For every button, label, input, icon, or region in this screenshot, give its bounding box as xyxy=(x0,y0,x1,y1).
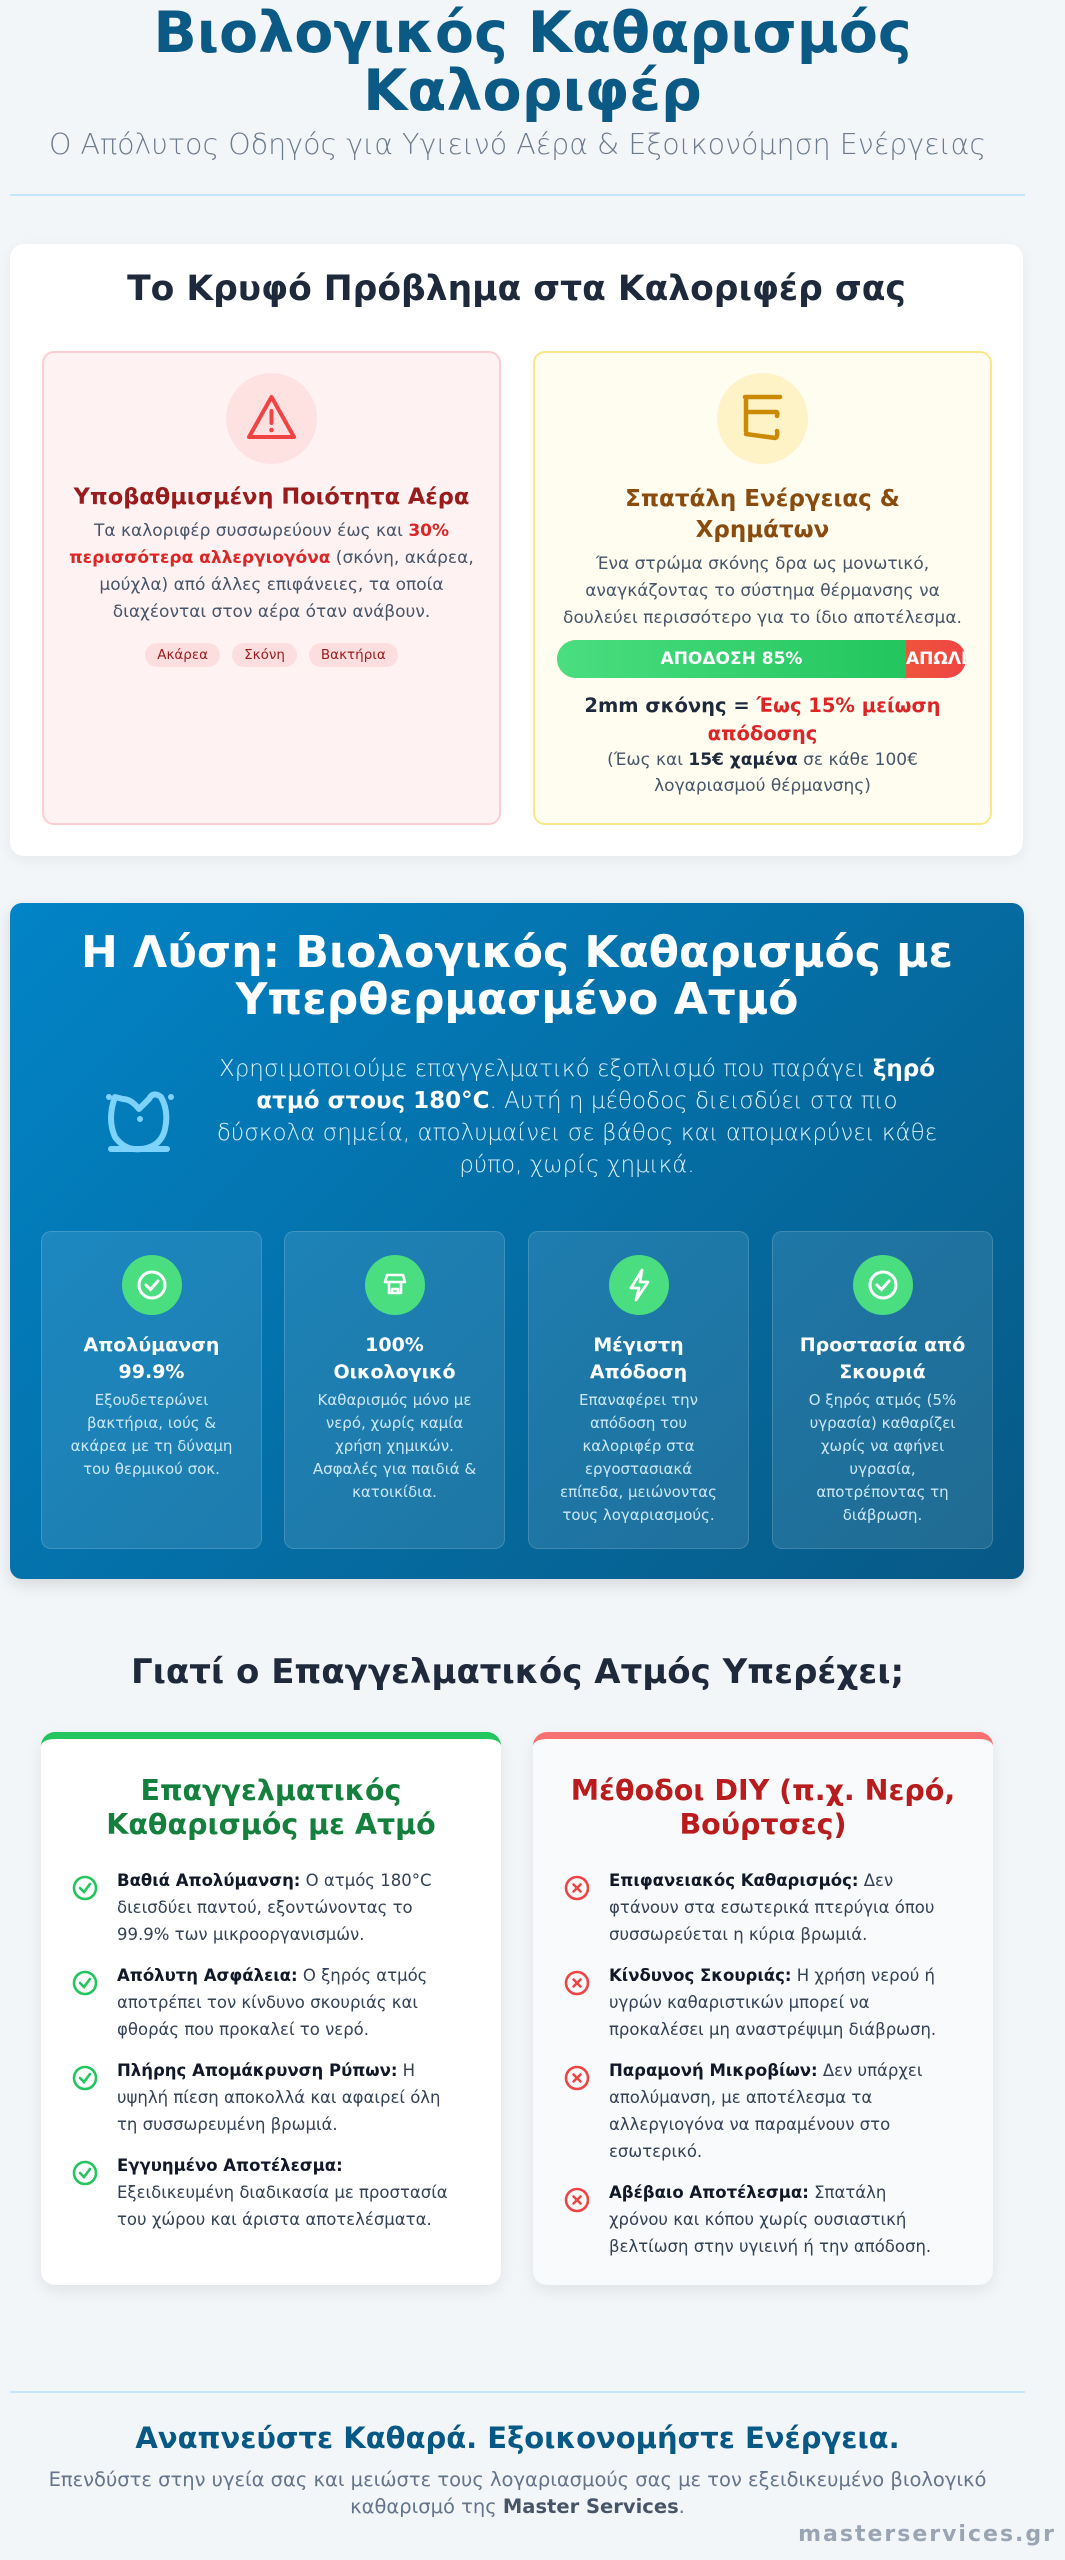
panel: DIY: αλλεργιογόνα να παραμένουν στο xyxy=(609,2115,890,2134)
card: eco xyxy=(284,1231,505,1549)
card: eco: κατοικίδια. xyxy=(352,1483,437,1501)
panel: solution xyxy=(10,903,1024,1579)
heading: Επαγγελματικός xyxy=(141,1774,401,1807)
card: disinfection: 99.9% xyxy=(119,1361,184,1383)
card: energy waste xyxy=(533,351,992,825)
icon: leaf xyxy=(365,1255,425,1315)
panel: professional: διεισδύει παντού, εξοντώνοντας το xyxy=(117,1898,413,1917)
heading xyxy=(571,1774,955,1841)
card: efficiency: καλοριφέρ στα xyxy=(582,1437,695,1455)
icon: bolt xyxy=(609,1255,669,1315)
footer text: καθαρισμό της Master Services. xyxy=(350,2495,685,2518)
panel: professional: υψηλή πίεση αποκολλά και αφαιρεί όλη xyxy=(117,2088,441,2107)
card: efficiency: εργοστασιακά xyxy=(585,1460,692,1478)
title: Καλοριφέρ xyxy=(363,58,702,124)
title xyxy=(153,0,912,124)
heading: solution: Υπερθερμασμένο Ατμό xyxy=(236,974,798,1025)
card: rust xyxy=(772,1231,993,1549)
card text: Ένα στρώμα σκόνης δρα ως μονωτικό, αναγκάζοντας το σύστημα θέρμανσης να δουλεύει περισσότερο για το ίδιο αποτέλεσμα. xyxy=(563,554,962,628)
icon: money xyxy=(717,373,808,464)
panel: problem xyxy=(10,244,1023,856)
efficiency bar xyxy=(557,640,966,678)
panel: professional: Βαθιά Απολύμανση: Ο ατμός 180°C xyxy=(117,1871,432,1890)
heading: solution xyxy=(81,927,953,1025)
card: efficiency: Μέγιστη xyxy=(593,1334,684,1356)
brand: masterservices.gr xyxy=(798,2522,1056,2547)
card: efficiency: επίπεδα, μειώνοντας xyxy=(560,1483,717,1501)
card: disinfection: του θερμικού σοκ. xyxy=(83,1460,220,1478)
card heading: Σπατάλη Ενέργειας & Χρημάτων xyxy=(625,486,900,543)
panel: DIY: Αβέβαιο Αποτέλεσμα: Σπατάλη xyxy=(609,2183,886,2202)
card: disinfection: ακάρεα με τη δύναμη xyxy=(71,1437,232,1455)
panel: DIY: προκαλέσει μη αναστρέψιμη διάβρωση. xyxy=(609,2020,936,2039)
heading: Καθαρισμός με Ατμό xyxy=(106,1808,436,1841)
panel: professional: του χώρου και άριστα αποτελέσματα. xyxy=(117,2210,432,2229)
card heading: Υποβαθμισμένη Ποιότητα Αέρα xyxy=(74,484,469,510)
card: eco: Καθαρισμός μόνο με xyxy=(318,1391,471,1409)
icon: warning xyxy=(226,373,317,464)
panel: DIY: εσωτερικό. xyxy=(609,2142,702,2161)
tags xyxy=(145,643,398,667)
solution text: Χρησιμοποιούμε επαγγελματικό εξοπλισμό που παράγει ξηρό ατμό στους 180°C. Αυτή η μέθοδος διεισδύει στα πιο δύσκολα σημεία, απολυμαίνει σε βάθος και απομακρύνει κάθε ρύπο, χωρίς χημικά. xyxy=(217,1056,937,1178)
list: cons xyxy=(564,1871,936,2256)
panel: DIY: χρόνου και κόπου χωρίς ουσιαστική xyxy=(609,2210,906,2229)
card: eco: 100% xyxy=(365,1334,424,1356)
card: rust: διάβρωση. xyxy=(843,1506,922,1524)
footer text: Επενδύστε στην υγεία σας και μειώστε τους λογαριασμούς σας με τον εξειδικευμένο βιολογικό xyxy=(49,2468,986,2491)
panel: professional xyxy=(41,1732,501,2285)
card: air quality xyxy=(42,351,501,825)
card: rust: υγρασία) καθαρίζει xyxy=(810,1414,955,1432)
tags: Ακάρεα xyxy=(157,647,208,663)
card: disinfection: Απολύμανση xyxy=(84,1334,219,1356)
panel: DIY: συσσωρεύεται η κύρια βρωμιά. xyxy=(609,1925,867,1944)
card: efficiency: Απόδοση xyxy=(590,1361,687,1383)
panel: professional: 99.9% των μικροοργανισμών. xyxy=(117,1925,364,1944)
subtitle: Ο Απόλυτος Οδηγός για Υγιεινό Αέρα & Εξοικονόμηση Ενέργειας xyxy=(49,128,986,161)
panel: DIY: Επιφανειακός Καθαρισμός: Δεν xyxy=(609,1871,893,1890)
icon: steam xyxy=(106,1091,174,1152)
card: eco: Ασφαλές για παιδιά & xyxy=(313,1460,476,1478)
card: rust: Προστασία από xyxy=(800,1334,965,1356)
heading: Μέθοδοι DIY (π.χ. Νερό, xyxy=(571,1774,955,1807)
panel: DIY: υγρών καθαριστικών μπορεί να xyxy=(609,1993,870,2012)
card: disinfection: βακτήρια, ιούς & xyxy=(87,1414,216,1432)
footer heading: Αναπνεύστε Καθαρά. Εξοικονομήστε Ενέργεια. xyxy=(135,2421,900,2455)
icons: checks xyxy=(72,1876,98,2186)
title: Βιολογικός Καθαρισμός xyxy=(153,0,912,66)
panel: professional: αποτρέπει τον κίνδυνο σκουριάς και xyxy=(117,1993,418,2012)
heading xyxy=(106,1774,436,1841)
card: efficiency xyxy=(528,1231,749,1549)
panel: DIY: Παραμονή Μικροβίων: Δεν υπάρχει xyxy=(609,2061,922,2080)
panel: DIY: φτάνουν στα εσωτερικά πτερύγια όπου xyxy=(609,1898,934,1917)
heading: Βούρτσες) xyxy=(679,1808,847,1841)
card: eco: Οικολογικό xyxy=(333,1361,456,1383)
icons: crosses xyxy=(564,1876,590,2212)
footer text xyxy=(49,2468,986,2518)
card: rust: υγρασία, xyxy=(849,1460,916,1478)
panel: DIY xyxy=(533,1732,993,2285)
card text: Τα καλοριφέρ συσσωρεύουν έως και 30% περισσότερα αλλεργιογόνα (σκόνη, ακάρεα, μούχλα) από άλλες επιφάνειες, τα οποία διαχέονται στον αέρα όταν ανάβουν. xyxy=(69,521,474,622)
panel: professional: Απόλυτη Ασφάλεια: Ο ξηρός ατμός xyxy=(117,1966,427,1985)
card: disinfection: Εξουδετερώνει xyxy=(95,1391,208,1409)
panel: DIY: απολύμανση, με αποτέλεσμα τα xyxy=(609,2088,872,2107)
card: rust: χωρίς να αφήνει xyxy=(821,1437,944,1455)
panel: professional: φθοράς που προκαλεί το νερό. xyxy=(117,2020,369,2039)
panel: professional: Εγγυημένο Αποτέλεσμα: xyxy=(117,2156,343,2175)
card: eco: χρήση χημικών. xyxy=(335,1437,454,1455)
icon: check xyxy=(853,1255,913,1315)
card: efficiency: Επαναφέρει την xyxy=(579,1391,698,1409)
card: efficiency: τους λογαριασμούς. xyxy=(562,1506,715,1524)
heading: problem: Το Κρυφό Πρόβλημα στα Καλοριφέρ σας xyxy=(127,269,906,309)
card: efficiency: απόδοση του xyxy=(590,1414,687,1432)
efficiency bar: ΑΠΟΔΟΣΗ 85% xyxy=(661,649,802,669)
tags: Σκόνη xyxy=(244,647,285,663)
feature cards xyxy=(41,1231,993,1549)
note text: (Έως και 15€ χαμένα σε κάθε 100€ λογαριασμού θέρμανσης) xyxy=(607,750,918,796)
panel: professional: τη συσσωρευμένη βρωμιά. xyxy=(117,2115,338,2134)
panel: DIY: βελτίωση στην υγιεινή ή την απόδοση. xyxy=(609,2237,931,2256)
list: pros xyxy=(72,1871,448,2229)
heading: solution: Η Λύση: Βιολογικός Καθαρισμός με xyxy=(81,927,953,978)
panel: professional: Εξειδικευμένη διαδικασία με προστασία xyxy=(117,2183,448,2202)
panel: professional: Πλήρης Απομάκρυνση Ρύπων: Η xyxy=(117,2061,415,2080)
panel: DIY: Κίνδυνος Σκουριάς: Η χρήση νερού ή xyxy=(609,1966,935,1985)
heading: comparison: Γιατί ο Επαγγελματικός Ατμός Υπερέχει; xyxy=(131,1652,904,1692)
card: rust: Ο ξηρός ατμός (5% xyxy=(809,1391,956,1409)
card: rust: Σκουριά xyxy=(839,1361,926,1383)
card: disinfection xyxy=(41,1231,262,1549)
tags: Βακτήρια xyxy=(321,647,386,663)
stat text: 2mm σκόνης = Έως 15% μείωση απόδοσης xyxy=(584,694,941,745)
icon: check xyxy=(122,1255,182,1315)
card: rust: αποτρέποντας τη xyxy=(816,1483,949,1501)
card: eco: νερό, χωρίς καμία xyxy=(326,1414,463,1432)
